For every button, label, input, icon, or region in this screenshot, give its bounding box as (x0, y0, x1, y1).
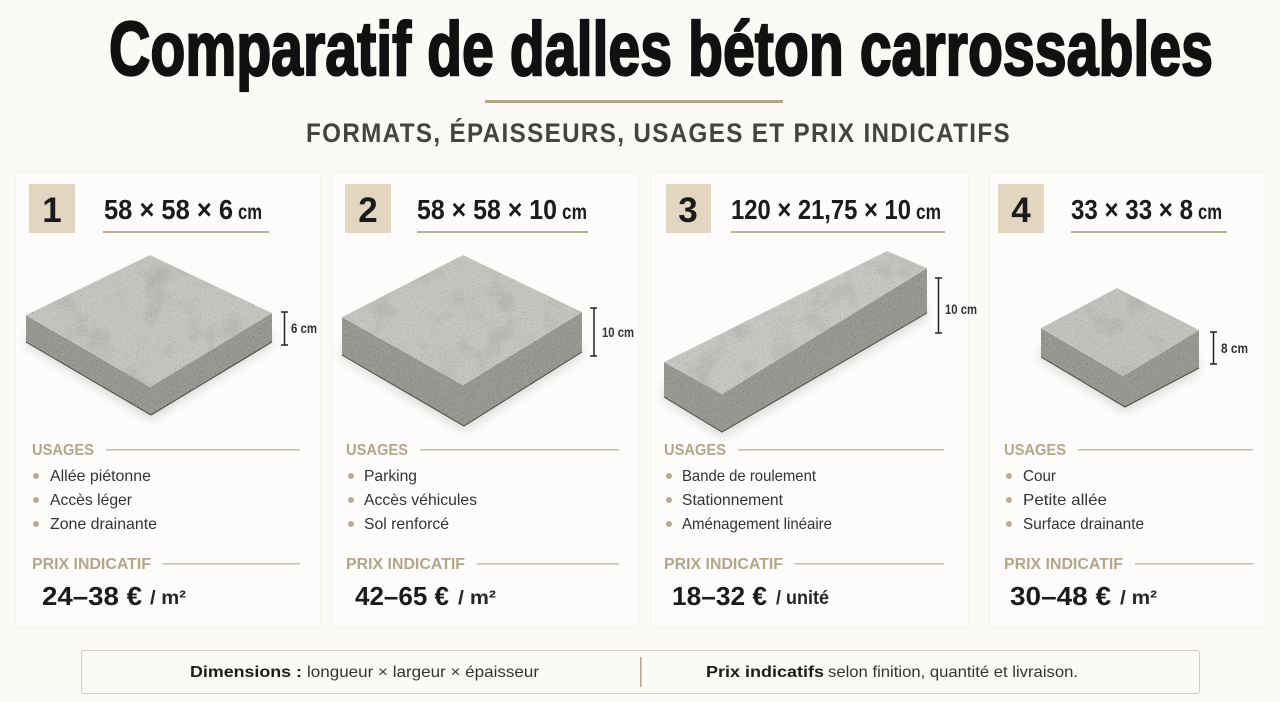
usages list 2: Accès véhicules (364, 492, 477, 509)
badge 2 (345, 184, 391, 233)
slab illustration 4 (1041, 288, 1199, 412)
panel: slab 3 (650, 172, 977, 628)
usages list 3 (666, 468, 832, 533)
format heading 1: 58 × 58 × 6 (104, 194, 233, 225)
price heading 4: PRIX INDICATIF (1004, 556, 1123, 573)
subtitle: FORMATS, ÉPAISSEURS, USAGES ET PRIX INDICATIFS (306, 117, 1011, 148)
slab illustration 3 (664, 251, 927, 437)
price 2 (355, 581, 496, 611)
price heading 1: PRIX INDICATIF (32, 556, 151, 573)
badge 3 (666, 184, 711, 233)
price heading 3: PRIX INDICATIF (664, 556, 783, 573)
usages list 3: Aménagement linéaire (682, 516, 832, 533)
price 4: 30–48 € (1010, 581, 1111, 611)
usages list 3: Bande de roulement (682, 468, 817, 485)
price 3 (672, 581, 829, 611)
usages heading 1: USAGES (32, 442, 94, 459)
usages list 4: Cour (1023, 468, 1057, 485)
format heading 1: cm (238, 201, 262, 224)
panel: slab 1 (16, 172, 320, 628)
usages list 4: Petite allée (1023, 492, 1107, 509)
usages list 4 (1006, 468, 1144, 533)
format heading 1 (103, 194, 269, 233)
thickness marker 2 (590, 308, 634, 356)
price 2: 42–65 € (355, 581, 449, 611)
price 4: / m² (1120, 588, 1157, 609)
footer: dimensions: longueur × largeur × épaisseur (307, 664, 540, 681)
slab illustration 1 (26, 255, 272, 420)
usages list 1: Accès léger (50, 492, 133, 509)
badge 2: 2 (358, 191, 378, 230)
format heading 2: cm (562, 201, 587, 224)
usages list 2: Sol renforcé (364, 516, 449, 533)
usages list 4: Surface drainante (1023, 516, 1144, 533)
price 2: / m² (458, 588, 496, 609)
badge 1: 1 (42, 191, 62, 230)
footer note (82, 650, 1200, 694)
thickness marker 4 (1210, 332, 1248, 364)
panel: slab 2 (332, 172, 638, 628)
badge 4: 4 (1011, 191, 1031, 230)
format heading 3: 120 × 21,75 × 10 (731, 194, 911, 225)
thickness marker 2: 10 cm (602, 325, 634, 340)
usages list 1 (33, 468, 157, 533)
footer: prices (706, 664, 1078, 681)
price 1: 24–38 € (42, 581, 142, 611)
usages heading 2: USAGES (346, 442, 408, 459)
thickness marker 1 (281, 312, 317, 345)
footer: prices: selon finition, quantité et livraison. (828, 664, 1078, 681)
badge 1 (29, 184, 75, 233)
price 4 (1010, 581, 1157, 611)
price 3: / unité (776, 588, 829, 609)
usages list 1: Allée piétonne (50, 468, 151, 485)
format heading 4: 33 × 33 × 8 (1071, 194, 1193, 225)
format heading 2: 58 × 58 × 10 (417, 194, 557, 225)
title rule (485, 100, 783, 103)
footer: dimensions (190, 664, 540, 681)
badge 3: 3 (678, 191, 698, 230)
usages list 2: Parking (364, 468, 417, 485)
price 1: / m² (150, 588, 186, 609)
thickness marker 3 (935, 278, 977, 333)
footer: dimensions: Dimensions : (190, 664, 302, 681)
thickness marker 3: 10 cm (945, 302, 977, 317)
usages list 3: Stationnement (682, 492, 784, 509)
panel: slab 4 (990, 172, 1266, 628)
price heading 2: PRIX INDICATIF (346, 556, 465, 573)
format heading 3: cm (916, 201, 941, 224)
usages heading 3: USAGES (664, 442, 726, 459)
usages list 2 (348, 468, 477, 533)
price 1 (42, 581, 186, 611)
slab illustration 2 (342, 255, 582, 431)
footer: prices: Prix indicatifs (706, 664, 824, 681)
thickness marker 1: 6 cm (291, 321, 317, 336)
badge 4 (998, 184, 1044, 233)
thickness marker 4: 8 cm (1221, 341, 1248, 356)
usages list 1: Zone drainante (50, 516, 157, 533)
price 3: 18–32 € (672, 581, 767, 611)
format heading 4: cm (1198, 201, 1222, 224)
usages heading 4: USAGES (1004, 442, 1066, 459)
